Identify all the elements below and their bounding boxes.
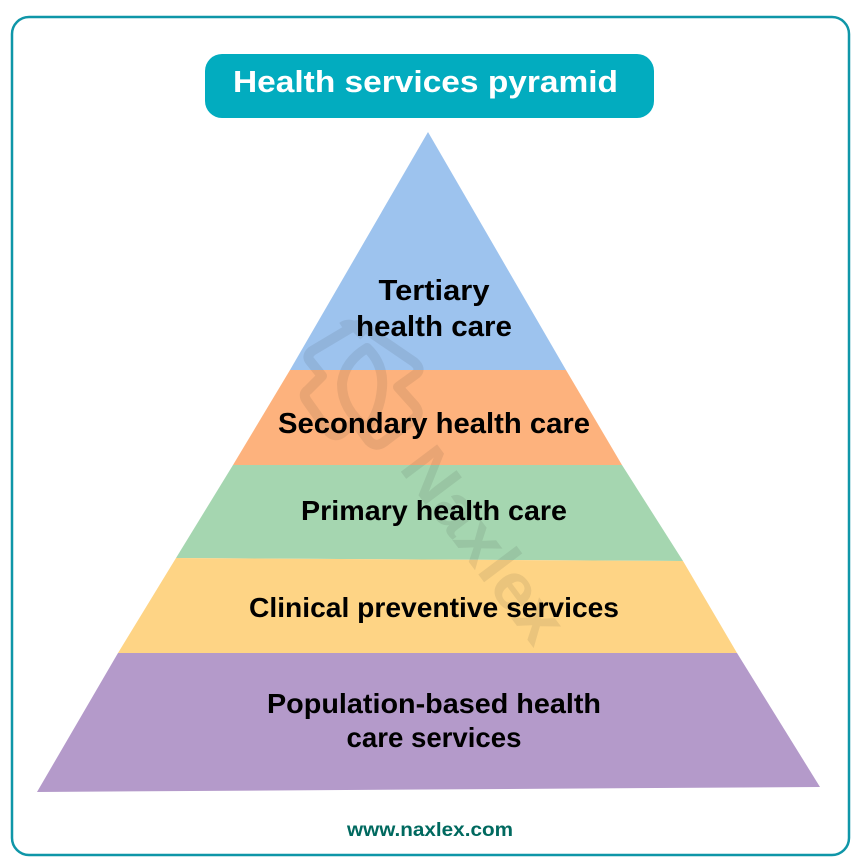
tier: population-based [37,653,820,792]
watermark logo [305,325,419,445]
label: tertiary: Tertiary [378,275,490,307]
label: population: Population-based health [267,688,601,719]
label: clinical: Clinical preventive services [249,592,619,623]
tier: secondary [233,370,622,465]
footer url: www.naxlex.com [346,820,513,841]
label: secondary: Secondary health care [278,408,590,440]
label: tertiary line 2: health care [356,311,512,343]
label: primary: Primary health care [301,495,567,526]
tier: primary [176,465,683,561]
title banner [205,54,654,118]
title banner: Health services pyramid [233,64,618,99]
label: population line 2: care services [346,722,522,753]
tier: tertiary [290,132,566,370]
tier: clinical preventive [118,558,737,653]
watermark [305,325,582,657]
pyramid [37,132,820,792]
watermark wordmark: Naxlex [387,432,582,657]
